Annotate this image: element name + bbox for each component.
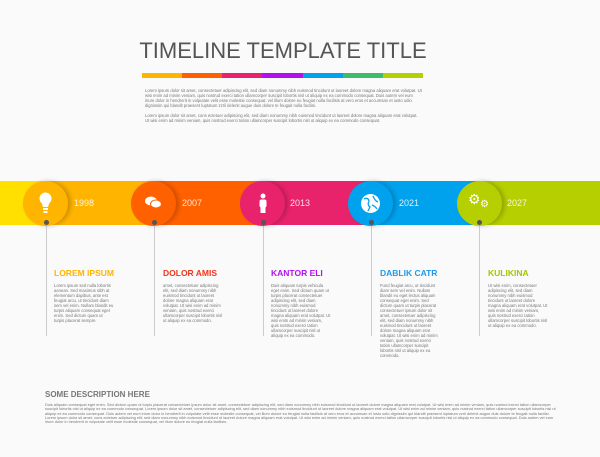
text: 2007	[182, 198, 202, 208]
item 2: amet, consectetuer adipiscing elit, sed diam nonummy nibh euismod tincidunt ut laoreet dolore magna aliquam erat volutpat. Ut wisi enim ad minim veniam, quis nostrud exerci ullamcorper suscipit lobortis nisl ut aliquip ex ea commodo.	[163, 283, 222, 323]
vertical lines	[46, 222, 47, 336]
title: TIMELINE TEMPLATE TITLE	[139, 38, 427, 63]
text: 2027	[507, 198, 527, 208]
color bar	[142, 73, 423, 78]
milestone 5 circle	[457, 181, 502, 226]
milestone 3 circle	[240, 181, 285, 226]
item 1: LOREM IPSUM	[54, 268, 114, 278]
intro text	[145, 88, 422, 123]
description text: Duis aliquam consequat eget enim. Sed dictum quam ut turpis placerat consectetuer ipsum dolor sit amet, consectetuer adipiscing elit, sed diam nonummy nibh euismod tincidunt ut laoreet dolore magna aliquam erat volutpat. Ut wisi enim ad minim veniam, quis nostrud exerci tation ullamcorper suscipit lobortis nisl ut aliquip ex ea commodo consequat. Lorem ipsum dolor sit amet, consectetuer adipiscing elit, sed diam nonummy nibh euismod tincidunt ut laoreet dolore magna aliquam erat volutpat. Ut wisi enim ad minim veniam, quis nostrud exerci tation ullamcorper suscipit lobortis nisl ut aliquip ex ea commodo consequat. Duis autem vel eum iriure dolor in hendrerit in vulputate velit esse molestie consequat, vel illum dolore eu feugiat nulla facilisis at vero eros et accumsan et iusto odio dignissim qui blandit praesent luptatum zzril delenit augue duis dolore te feugait nulla facilisi. Lorem ipsum dolor sit amet, cons ectetuer adipiscing elit, sed diam nonummy nibh euismod tincidunt ut laoreet dolore magna aliquam erat volutpat. Ut wisi enim ad minim veniam, quis nostrud exerci tation ullamcorper suscipit lobortis nisl ut aliquip ex ea commodo consequat. Duis autem vel eum iriure dolor in hendrerit in vulputate velit esse molestie consequat, vel illum dolore eu feugiat nulla facilisis.	[45, 402, 556, 424]
milestone 2 circle	[131, 181, 176, 226]
dots	[44, 220, 49, 225]
item 3: Duis aliquam turpis vehicula eget enim. Sed dictum quam ut turpis placerat consectetuer adipiscing elit, sed diam nonummy nibh euismod tincidunt ut laoreet dolore magna aliquam erat volutpat. Ut wisi enim ad minim veniam, quis nostrud exerci tation ullamcorper suscipit nisl ut aliquip ex ea commodo.	[271, 283, 330, 338]
item 3: KANTOR ELI	[271, 268, 323, 278]
description heading: SOME DESCRIPTION HERE	[45, 390, 150, 399]
item 4: Fund feugiat arcu, ut tincidunt diam sem vel enim. Nullam blandit eu eget lectus aliquam consequat eget enim. Sed dictum quam ut turpis placerat consectetuer ipsum dolor sit amet, consectetuer adipiscing elit, sed diam nonummy nibh euismod tincidunt ut laoreet dolore magna aliquam erat volutpat. Ut wisi enim ad minim veniam, quis nostrud exerci tation ullamcorper suscipit lobortis nisl ut aliquip ex ea commodo.	[380, 283, 438, 358]
text: 2013	[290, 198, 310, 208]
item 5: KULIKINA	[488, 268, 529, 278]
intro text: Lorem ipsum dolor sit amet, cons ectetuer adipiscing elit, sed diam nonummy nibh euismod tincidunt ut laoreet dolore magna aliquam erat volutpat. Ut wisi enim ad minim veniam, quis nostrud exerci tation ullamcorper suscipit lobortis nisl ut aliquip ex ea commodo consequat.	[145, 113, 418, 123]
years: 1998	[74, 198, 94, 208]
milestone 4 circle	[348, 181, 393, 226]
milestone 5 circle: ⚙	[480, 199, 489, 210]
item 4: DABLIK CATR	[380, 268, 437, 278]
milestone 1 circle	[23, 181, 68, 226]
text: 2021	[399, 198, 419, 208]
item 5: Ut wisi enim, consectetuer adipiscing elit, sed diam nonummy nibh euismod tincidunt ut laoreet dolore magna aliquam erat volutpat. Ut wisi enim ad minim veniam, quis nostrud exerci tation ullamcorper suscipit lobortis nisl ut aliquip ex ea commodo.	[488, 283, 547, 328]
timeline band	[0, 181, 600, 225]
intro text: Lorem ipsum dolor sit amet, consectetuer adipiscing elit, sed diam nonummy nibh euismod tincidunt ut laoreet dolore magna aliquam erat volutpat. Ut wisi enim ad minim veniam, quis nostrud exerci tation ullamcorper suscipit lobortis nisl ut aliquip ex ea commodo consequat. Duis autem vel eum iriure dolor in hendrerit in vulputate velit esse molestie consequat, vel illum dolore eu feugiat nulla facilisis at vero eros et accumsan et iusto odio dignissim qui blandit praesent luptatum zzril delenit augue duis dolore te feugait nulla facilisi.	[145, 88, 422, 108]
milestone 5 circle: ⚙	[468, 191, 481, 207]
item 2: DOLOR AMIS	[163, 268, 217, 278]
item 1: Lorem ipsum sed nulla lobortis aenean. Sed maximus nibh at elementum dapibus, ante est feugiat arcu, ut tincidunt diam sem vel enim. Nullam blandit eu turpis aliquam consequat eget enim. Sed dictum quam ut turpis placerat sempre.	[54, 283, 113, 323]
